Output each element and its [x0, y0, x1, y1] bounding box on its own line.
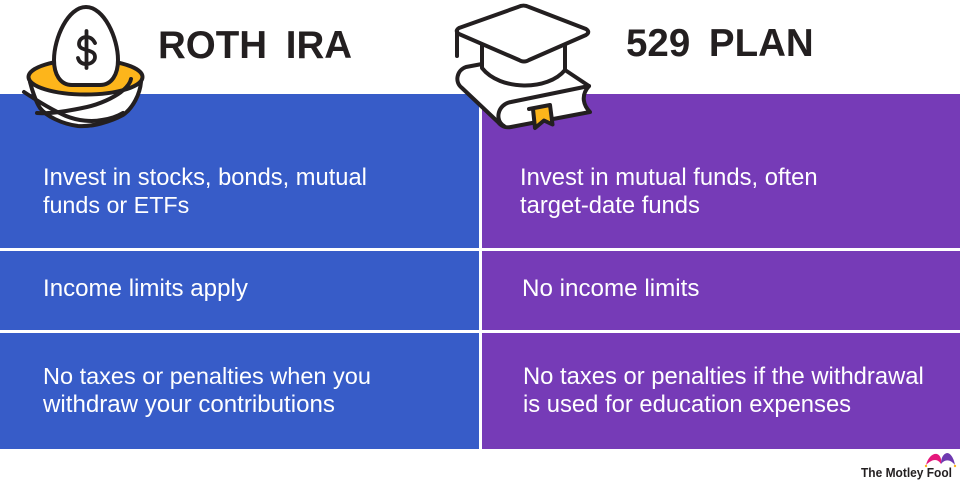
text: 529 investments — [520, 164, 818, 219]
text: Roth withdrawals: withdraw your contributions — [43, 391, 335, 418]
text: 529 income limits: No income limits — [522, 275, 699, 302]
heading: Roth IRA: ROTH IRA — [158, 24, 352, 67]
icon: nest egg — [24, 7, 142, 126]
text: 529 withdrawals: No taxes or penalties if the withdrawal — [523, 363, 924, 390]
text: Roth withdrawals — [43, 363, 371, 418]
text: logo wordmark: The Motley Fool — [861, 465, 952, 480]
panel: 529 income limits — [482, 251, 960, 330]
panel: Roth IRA income limits — [0, 251, 479, 330]
text: Roth investments: Invest in stocks, bonds, mutual — [43, 165, 367, 191]
text: 529 investments: Invest in mutual funds, often — [520, 164, 818, 191]
text: 529 withdrawals: is used for education expenses — [523, 391, 851, 418]
text: Roth investments: funds or ETFs — [43, 192, 189, 218]
logo: The Motley Fool — [861, 453, 956, 480]
text: Roth investments — [43, 165, 367, 218]
panel: Roth IRA withdrawals — [0, 333, 479, 449]
text: Roth withdrawals: No taxes or penalties when you — [43, 363, 371, 389]
text: Roth income limits: Income limits apply — [43, 275, 248, 302]
panel: 529 withdrawals — [482, 333, 960, 449]
panel: Roth IRA investments — [0, 94, 479, 248]
icon: jester hat — [925, 453, 956, 467]
text: 529 withdrawals — [523, 363, 924, 418]
icon: graduation cap on book — [457, 6, 590, 128]
heading: 529 Plan: 529 PLAN — [626, 22, 814, 65]
panel: 529 investments — [482, 94, 960, 248]
text: 529 investments: target-date funds — [520, 192, 700, 219]
